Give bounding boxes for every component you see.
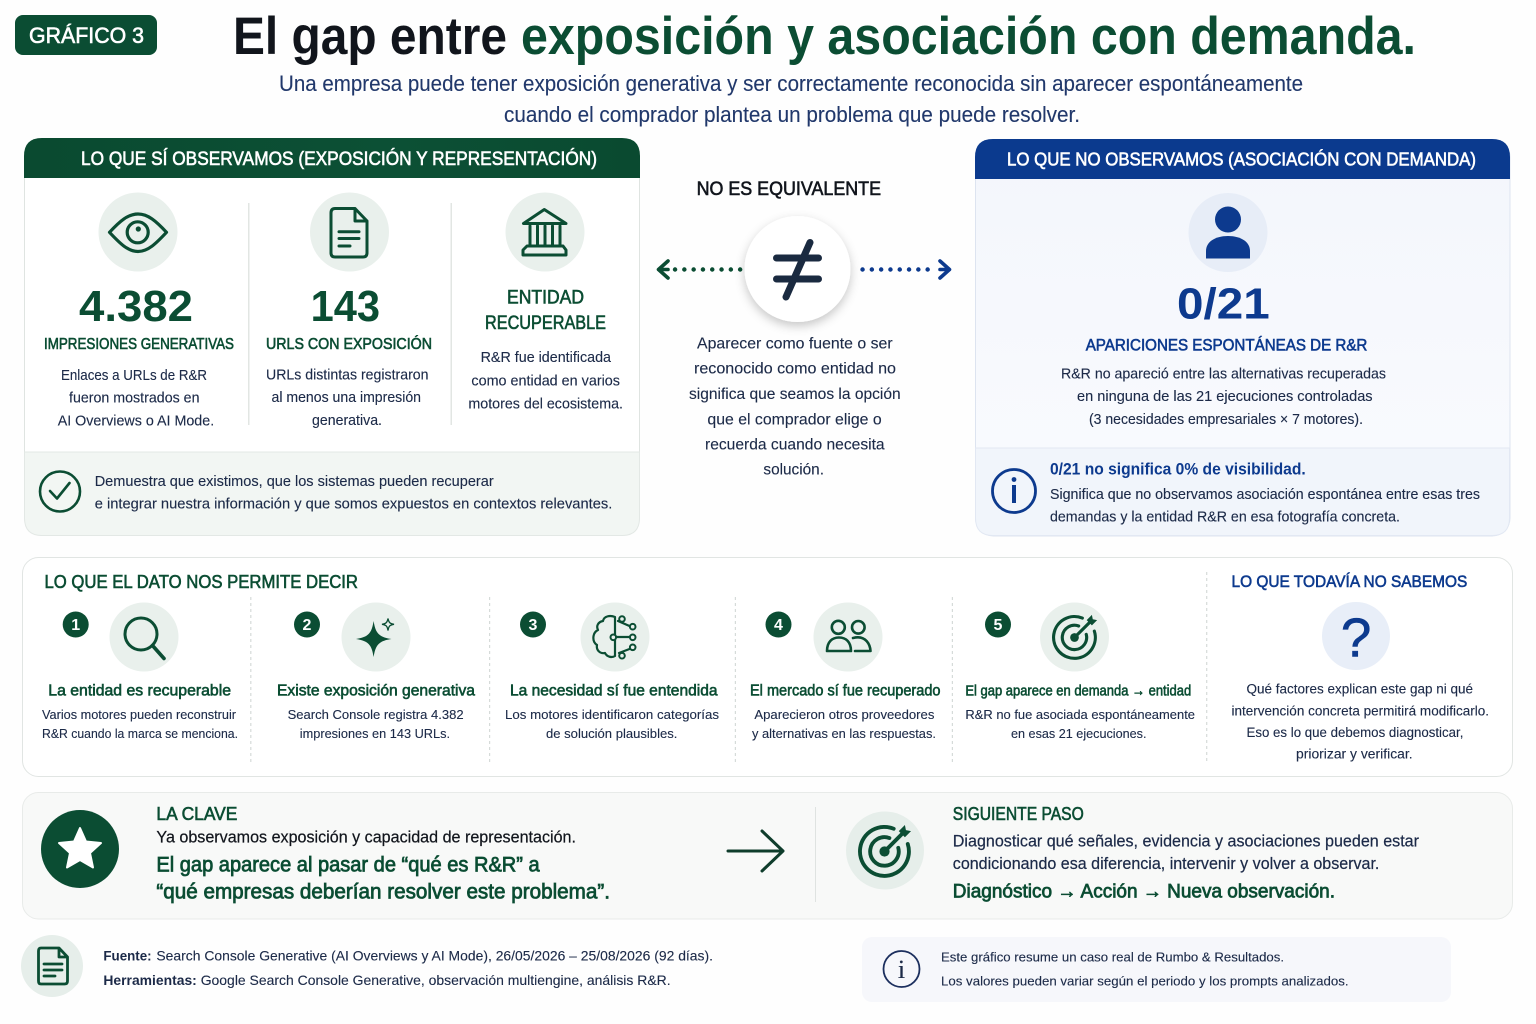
item 3: necesidad entendida: La necesidad sí fue entendida [510,682,718,699]
text: siguiente paso: Diagnosticar qué señales, evidencia y asociaciones pueden estar [953,832,1419,850]
icon: not equal [744,216,850,322]
badge: Gráfico 3 [15,15,157,55]
text: explanation: reconocido como entidad no [694,361,896,378]
text: siguiente paso: SIGUIENTE PASO [953,804,1084,824]
panel header: sí observamos: LO QUE SÍ OBSERVAMOS (EXPOSICIÓN Y REPRESENTACIÓN) [81,148,597,170]
text: explanation: significa que seamos la opción [689,386,901,403]
footer: source: Google Search Console Generative, observación multiengine, análisis R&R. [201,972,671,988]
item 2: exposición generativa: Search Console registra 4.382 [288,707,464,722]
panel: lo que no observamos [975,139,1510,536]
stat: 4.382 impresiones generativas: 4.382 [79,282,193,331]
heading: no es equivalente: NO ES EQUIVALENTE [697,179,881,200]
subtitle: Una empresa puede tener exposición generativa y ser correctamente reconocida sin aparecer espontáneamente [279,71,1303,96]
text: la clave: “qué empresas deberían resolver este problema”. [156,880,610,904]
stat: 0/21 apariciones espontáneas: en ninguna de las 21 ejecuciones controladas [1077,389,1373,405]
footer: note: Este gráfico resume un caso real de Rumbo & Resultados. [941,950,1284,965]
badge: Gráfico 3: GRÁFICO 3 [29,23,144,48]
item 5: gap demanda entidad: 5 [994,617,1003,634]
item 4: mercado recuperado: Aparecieron otros proveedores [754,707,935,722]
item 3: necesidad entendida: 3 [529,617,538,634]
item 1: entidad recuperable [42,602,238,741]
callout: 0/21 no significa 0% [976,448,1510,536]
text: explanation: recuerda cuando necesita [705,437,885,454]
item 2: exposición generativa: impresiones en 143 URLs. [300,726,450,741]
item 5: gap demanda entidad [965,602,1195,741]
stat: entidad recuperable: R&R fue identificada [481,350,612,366]
block: lo que todavía no sabemos: LO QUE TODAVÍA NO SABEMOS [1232,572,1467,591]
center: no es equivalente [658,179,950,479]
stat: 143 urls con exposición: al menos una impresión [272,390,421,406]
arrow: right [728,831,783,871]
block: lo que todavía no sabemos: Eso es lo que debemos diagnosticar, [1246,725,1463,740]
text: explanation: Aparecer como fuente o ser [697,335,893,352]
stat: 143 urls con exposición [266,282,432,429]
text: siguiente paso [953,804,1419,902]
arrow: left green dotted [658,261,741,278]
callout: 0/21 no significa 0%: 0/21 no significa 0% de visibilidad. [1050,459,1306,478]
arrow: right blue dotted [862,261,950,278]
item 4: mercado recuperado [750,602,941,741]
text: la clave: Ya observamos exposición y capacidad de representación. [156,828,576,846]
item 1: entidad recuperable: 1 [71,617,80,634]
panel: la clave y siguiente paso [22,792,1512,919]
subtitle [279,71,1303,127]
callout: 0/21 no significa 0%: Significa que no observamos asociación espontánea entre esas tres [1050,487,1480,503]
text: la clave [156,804,610,904]
heading: lo que el dato: LO QUE EL DATO NOS PERMITE DECIR [44,572,358,592]
item 5: gap demanda entidad: en esas 21 ejecuciones. [1011,726,1146,741]
stat: 4.382 impresiones generativas: IMPRESIONES GENERATIVAS [44,336,234,353]
item 1: entidad recuperable: R&R cuando la marca se menciona. [42,726,238,741]
item 2: exposición generativa [277,602,475,741]
text: la clave: El gap aparece al pasar de “qué es R&R” a [156,854,540,876]
item 1: entidad recuperable: La entidad es recuperable [48,682,231,699]
icon: target [846,812,924,890]
stat: 4.382 impresiones generativas [44,282,234,429]
item 4: mercado recuperado: El mercado sí fue recuperado [750,682,941,699]
item 2: exposición generativa: 2 [303,617,312,634]
footer: note [862,937,1451,1002]
stat: entidad recuperable: motores del ecosistema. [468,397,623,413]
icon: star [41,810,119,888]
subtitle: cuando el comprador plantea un problema que puede resolver. [504,102,1080,127]
item 3: necesidad entendida [505,602,720,741]
title: El gap entre [233,7,507,66]
stat: 0/21 apariciones espontáneas: (3 necesidades empresariales × 7 motores). [1089,412,1363,428]
stat: 143 urls con exposición: URLS CON EXPOSICIÓN [266,336,432,353]
block: lo que todavía no sabemos: ? [1341,606,1371,668]
callout: demuestra que existimos [24,452,640,536]
text: explanation [689,335,901,479]
stat: entidad recuperable [468,287,623,413]
item 2: exposición generativa: Existe exposición generativa [277,682,475,699]
block: lo que todavía no sabemos [1232,572,1489,761]
item 3: necesidad entendida: Los motores identificaron categorías [505,707,720,722]
panel header: sí observamos [24,138,640,178]
stat: 0/21 apariciones espontáneas [1061,280,1386,428]
stat: 0/21 apariciones espontáneas: R&R no apareció entre las alternativas recuperadas [1061,366,1386,382]
stat: 4.382 impresiones generativas: Enlaces a URLs de R&R [61,368,207,384]
callout: demuestra que existimos: e integrar nuestra información y que somos expuestos en contextos relevantes. [95,496,612,513]
footer: source [21,935,713,997]
stat: 143 urls con exposición: URLs distintas registraron [266,367,428,383]
item 5: gap demanda entidad: El gap aparece en demanda → entidad [965,682,1191,699]
stat: entidad recuperable: como entidad en varios [471,374,620,390]
block: lo que todavía no sabemos: priorizar y verificar. [1296,746,1413,761]
stat: entidad recuperable: ENTIDAD [507,287,584,308]
stat: 143 urls con exposición: generativa. [312,413,382,429]
footer: source: Fuente: [103,947,152,963]
callout: demuestra que existimos: Demuestra que existimos, que los sistemas pueden recuperar [95,473,494,490]
stat: 143 urls con exposición: 143 [311,282,380,331]
item 1: entidad recuperable: Varios motores pueden reconstruir [42,707,237,722]
callout: 0/21 no significa 0%: demandas y la entidad R&R en esa fotografía concreta. [1050,510,1400,526]
icon: document [310,192,389,272]
footer: note: i [898,955,905,984]
text: siguiente paso: condicionando esa diferencia, intervenir y volver a observar. [953,855,1379,873]
text: siguiente paso: Diagnóstico → Acción → Nueva observación. [953,882,1335,902]
panel header: no observamos: LO QUE NO OBSERVAMOS (ASOCIACIÓN CON DEMANDA) [1007,148,1476,169]
stat: 4.382 impresiones generativas: fueron mostrados en [69,391,200,407]
footer: note: Los valores pueden variar según el periodo y los prompts analizados. [941,974,1349,988]
title: exposición y asociación con demanda. [521,7,1416,66]
text: la clave: LA CLAVE [156,804,237,824]
item 3: necesidad entendida: de solución plausibles. [546,726,677,741]
footer: source: Herramientas: [103,972,197,988]
stat: 0/21 apariciones espontáneas: 0/21 [1177,280,1270,328]
block: lo que todavía no sabemos: Qué factores explican este gap ni qué [1246,682,1473,697]
stat: 0/21 apariciones espontáneas: APARICIONES ESPONTÁNEAS DE R&R [1086,336,1367,355]
stat: 4.382 impresiones generativas: AI Overviews o AI Mode. [58,413,214,429]
text: explanation: que el comprador elige o [707,412,882,429]
panel header: no observamos [975,139,1510,179]
block: lo que todavía no sabemos: intervención concreta permitirá modificarlo. [1232,703,1489,718]
panel: lo que sí observamos [24,138,640,536]
stat: entidad recuperable: RECUPERABLE [485,313,606,334]
item 4: mercado recuperado: 4 [774,617,783,634]
footer: source: Search Console Generative (AI Overviews y AI Mode), 26/05/2026 – 25/08/2026 (92 días). [156,947,713,963]
icon: person [1188,193,1268,272]
item 4: mercado recuperado: y alternativas en las respuestas. [752,726,936,741]
item 5: gap demanda entidad: R&R no fue asociada espontáneamente [965,707,1195,722]
icon: eye [98,192,178,272]
panel: lo que el dato nos permite decir [22,558,1512,776]
icon: institution building [506,192,584,272]
text: explanation: solución. [763,462,824,479]
